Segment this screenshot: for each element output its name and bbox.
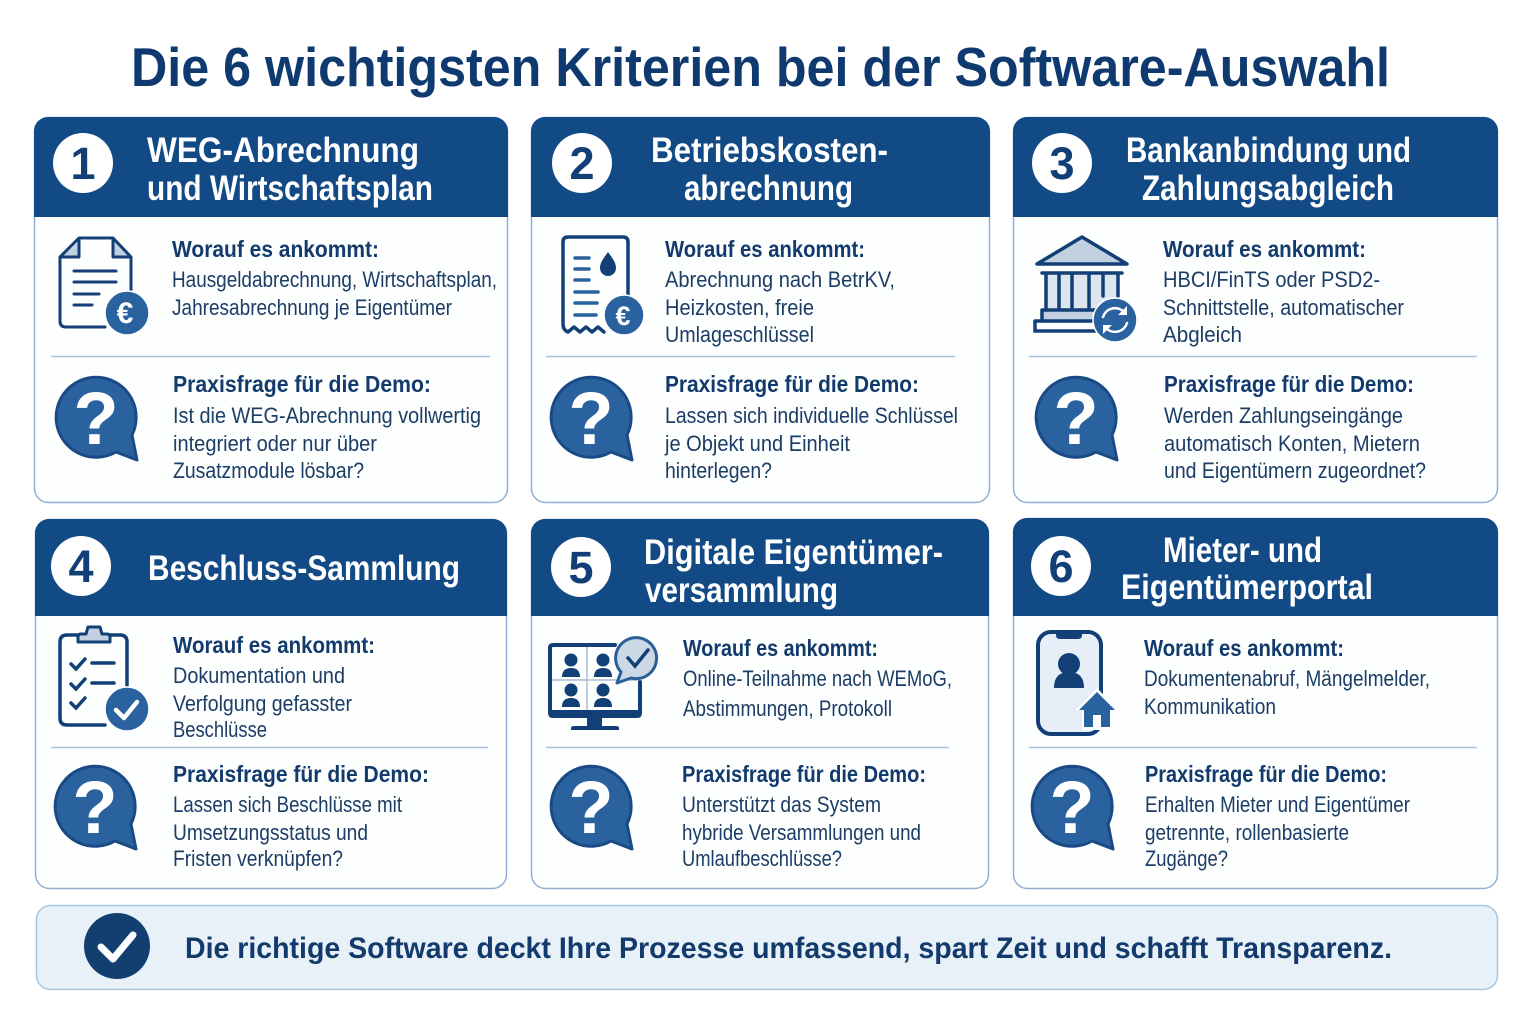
number badge: 2 (569, 138, 595, 189)
icon: document with euro: € (117, 297, 134, 330)
heading (1126, 131, 1411, 208)
text: Worauf es ankommt: Umlageschlüssel (665, 322, 814, 347)
text: Praxisfrage: Praxisfrage für die Demo: (682, 761, 926, 787)
icon: clipboard checklist (60, 627, 149, 731)
text: Praxisfrage (1145, 761, 1410, 871)
heading: Eigentümerportal (1121, 568, 1373, 607)
icon: question bubble: ? (72, 766, 118, 849)
number badge: 4 (68, 541, 94, 592)
text: Praxisfrage: Unterstützt das System (682, 792, 881, 817)
icon: question bubble: ? (568, 766, 614, 849)
text: Praxisfrage: Ist die WEG-Abrechnung vollwertig (173, 403, 481, 428)
panel background (34, 118, 508, 502)
header band (531, 519, 989, 616)
icon: receipt with drop and euro: € (615, 301, 631, 331)
text: Praxisfrage: Praxisfrage für die Demo: (173, 761, 429, 787)
text: Praxisfrage: Praxisfrage für die Demo: (173, 371, 431, 397)
text: Praxisfrage (1164, 371, 1426, 483)
panel background (1014, 518, 1498, 888)
number badge (1032, 133, 1092, 193)
text: Worauf es ankommt: Abgleich (1163, 322, 1242, 347)
text: Worauf es ankommt: Worauf es ankommt: (665, 236, 865, 262)
text: Praxisfrage: je Objekt und Einheit (664, 431, 851, 456)
panel: 2 Betriebskostenabrechnung (531, 117, 990, 502)
text: Praxisfrage: Zusatzmodule lösbar? (173, 458, 364, 483)
panel background (532, 118, 990, 502)
icon: question bubble (56, 377, 137, 460)
header band (1013, 518, 1498, 616)
number badge (1031, 536, 1091, 596)
text: Worauf es ankommt: Heizkosten, freie (665, 295, 814, 320)
heading: Digitale Eigentümer- (644, 533, 943, 572)
text: Worauf es ankommt: Abstimmungen, Protokoll (683, 696, 892, 721)
panel: 5 Digitale Eigentümerversammlung (531, 519, 989, 888)
text: Praxisfrage: Zugänge? (1145, 846, 1228, 871)
callout: conclusion banner (36, 906, 1498, 990)
number badge (552, 133, 612, 193)
text: Praxisfrage: automatisch Konten, Mietern (1164, 431, 1420, 456)
heading: Betriebskosten- (651, 131, 888, 170)
heading: Beschluss-Sammlung (148, 549, 460, 588)
text: Worauf es ankommt (1144, 635, 1430, 719)
text: Praxisfrage: integriert oder nur über (173, 431, 377, 456)
text: Praxisfrage: Fristen verknüpfen? (173, 846, 343, 871)
text: Worauf es ankommt: HBCI/FinTS oder PSD2- (1163, 267, 1380, 292)
number badge: 3 (1049, 138, 1075, 189)
text: Praxisfrage: Praxisfrage für die Demo: (1164, 371, 1414, 397)
text: Worauf es ankommt: Online-Teilnahme nach WEMoG, (683, 666, 952, 691)
icon: check circle (84, 913, 150, 979)
banner background (36, 906, 1498, 990)
text: Praxisfrage (173, 761, 429, 871)
panel: 4 Beschluss-Sammlung (35, 519, 507, 888)
icon: document with euro (60, 238, 149, 335)
heading: Bankanbindung und (1126, 131, 1411, 170)
heading: Zahlungsabgleich (1142, 169, 1394, 208)
icon: question bubble (1036, 377, 1117, 460)
text: Worauf es ankommt (1163, 236, 1404, 347)
header band (34, 117, 508, 217)
text: Praxisfrage (173, 371, 481, 483)
number badge: 5 (568, 542, 594, 593)
panel background (36, 520, 506, 888)
icon: question bubble: ? (73, 377, 119, 460)
text: Worauf es ankommt: Worauf es ankommt: (1163, 236, 1366, 262)
text: Worauf es ankommt: Jahresabrechnung je Eigentümer (172, 295, 452, 320)
text: Praxisfrage: und Eigentümern zugeordnet? (1164, 458, 1426, 483)
text: Praxisfrage: getrennte, rollenbasierte (1145, 820, 1349, 845)
icon: question bubble (1032, 766, 1113, 849)
text: Worauf es ankommt: Schnittstelle, automatischer (1163, 295, 1404, 320)
text: Worauf es ankommt (172, 236, 497, 320)
text: Worauf es ankommt: Beschlüsse (173, 717, 267, 742)
heading: und Wirtschaftsplan (147, 169, 433, 208)
panel: 1 WEG-Abrechnung (34, 117, 508, 502)
text: Praxisfrage (682, 761, 926, 871)
heading (1121, 531, 1373, 607)
icon: question bubble: ? (568, 377, 614, 460)
text: Worauf es ankommt: Worauf es ankommt: (683, 635, 878, 661)
icon: question bubble: ? (1049, 766, 1095, 849)
header band (35, 519, 507, 616)
text: Worauf es ankommt: Abrechnung nach BetrKV, (665, 267, 895, 292)
heading: Mieter- und (1163, 531, 1322, 570)
number badge (53, 133, 113, 193)
icon: phone with person and house (1038, 632, 1118, 734)
icon: question bubble (551, 766, 632, 849)
text: Worauf es ankommt: Verfolgung gefasster (173, 691, 352, 716)
text: Worauf es ankommt: Worauf es ankommt: (1144, 635, 1344, 661)
icon: receipt with drop and euro (563, 237, 644, 335)
number badge (551, 537, 611, 597)
text: Worauf es ankommt (683, 635, 952, 721)
icon: question bubble (55, 766, 136, 849)
heading: versammlung (645, 571, 838, 610)
panel background (532, 520, 988, 888)
heading (651, 131, 888, 208)
text: Praxisfrage: Lassen sich individuelle Schlüssel (665, 403, 958, 428)
panel: 3 Bankanbindung (1013, 117, 1498, 502)
text: Worauf es ankommt: Dokumentation und (173, 663, 345, 688)
heading (147, 131, 433, 208)
text: Praxisfrage: Praxisfrage für die Demo: (1145, 761, 1387, 787)
text: Worauf es ankommt: Worauf es ankommt: (172, 236, 379, 262)
text: Praxisfrage: Praxisfrage für die Demo: (665, 371, 919, 397)
text: Worauf es ankommt: Kommunikation (1144, 694, 1276, 719)
icon: bank with sync (1035, 237, 1137, 342)
number badge: 6 (1048, 541, 1074, 592)
title: Die 6 wichtigsten Kriterien bei der Software-Auswahl (131, 36, 1390, 98)
number badge (51, 536, 111, 596)
text: Worauf es ankommt: Hausgeldabrechnung, Wirtschaftsplan, (172, 267, 497, 292)
panel background (1014, 118, 1498, 502)
text: Praxisfrage: hinterlegen? (665, 458, 772, 483)
heading: WEG-Abrechnung (147, 131, 419, 170)
heading (644, 533, 943, 610)
heading: abrechnung (684, 169, 853, 208)
icon: question bubble (551, 377, 632, 460)
text: Praxisfrage: Lassen sich Beschlüsse mit (173, 792, 403, 817)
conclusion text: Die richtige Software deckt Ihre Prozesse umfassend, spart Zeit und schafft Transparenz. (185, 932, 1392, 965)
icon: question bubble: ? (1053, 377, 1099, 460)
header band (531, 117, 990, 217)
text: Praxisfrage: Umsetzungsstatus und (173, 820, 368, 845)
text: Worauf es ankommt: Worauf es ankommt: (173, 632, 375, 658)
text: Praxisfrage: hybride Versammlungen und (682, 820, 921, 845)
number badge: 1 (70, 138, 96, 189)
text: Worauf es ankommt (173, 632, 375, 742)
text: Praxisfrage: Erhalten Mieter und Eigentümer (1145, 792, 1410, 817)
text: Worauf es ankommt: Dokumentenabruf, Mängelmelder, (1144, 666, 1430, 691)
header band (1013, 117, 1498, 217)
text: Praxisfrage: Umlaufbeschlüsse? (682, 846, 842, 871)
panel: 6 Mieter- und Eigentümerportal (1013, 518, 1498, 888)
text: Praxisfrage: Werden Zahlungseingänge (1164, 403, 1403, 428)
text: Worauf es ankommt (665, 236, 895, 347)
text: Praxisfrage (664, 371, 958, 483)
icon: video meeting monitor (550, 638, 657, 730)
